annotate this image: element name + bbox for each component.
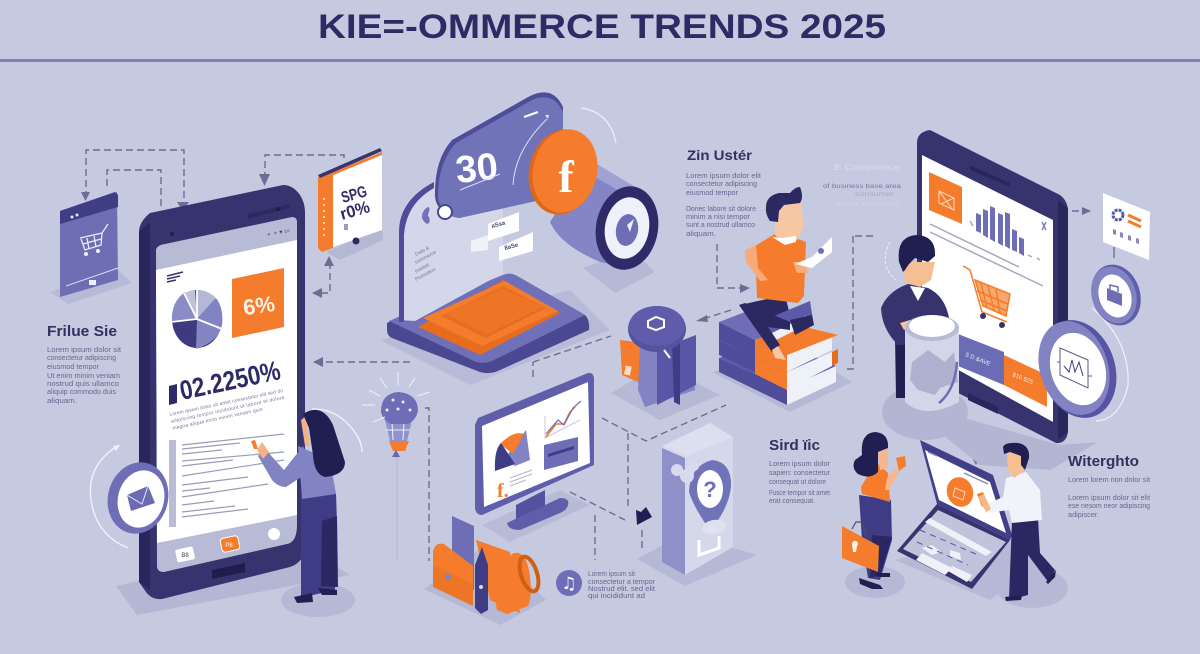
line chart on monitor [544,401,581,470]
orange stat card [232,268,284,338]
text block: Zin Ustér: aliquam. [686,229,716,238]
text block: Frilue Sie: consectetur adipiscing [47,353,116,362]
number bubble 30 [422,92,563,224]
text block: Zin Ustér: consectetur adipiscing [686,179,757,188]
skewed body text [169,388,287,432]
right phone screen: $16 $25 [1011,372,1034,386]
open laptop [895,440,1040,600]
text block: Sird iic [769,437,831,505]
central platform with orange tile: Data & [414,245,431,258]
mini cards on platform panel [471,212,533,261]
lock circle icon [1084,258,1148,332]
text block: Frilue Sie: aliquam. [47,396,77,405]
text block: Zin Ustér: minim a nisi tempor [686,212,750,221]
text block: Sird iic: consequat ut dolore [769,477,826,486]
central platform with orange tile: Promotion [414,267,437,283]
SPG card [318,148,383,260]
text block: Witerghto: ese nesom neor adipiscing [1068,501,1150,510]
text block: Frilue Sie: eiusmod tempor [47,362,99,371]
orange coin and dial cylinder [521,108,665,293]
text block: Sird iic: Sird ïic [769,437,820,454]
text block: Frilue Sie: aliquip commodo duis [47,387,116,396]
text block: E-Commerce: value retention [836,201,900,208]
text block: Frilue Sie: nostrud quis ullamco [47,379,119,388]
man with tablet sitting on books [712,187,852,412]
text block: Sird iic: Fusce tempor sit amet [769,488,831,497]
text block: Witerghto: Lorem ipsum dolor sit elit [1068,493,1151,502]
mini cards on platform panel: aSsa [491,220,507,230]
stack of books [712,312,852,412]
main smartphone [116,185,350,615]
title: KIE=-OMMERCE TRENDS 2025 [318,8,886,46]
bottom nav icons [175,528,280,563]
pie on monitor [495,430,530,471]
skewed body text: adipiscing tempor incididunt ut labore et dolore [170,395,285,425]
text block: E-Commerce: of business base area [823,183,901,190]
text block: Zin Ustér: Lorem ipsum dolor elit [686,171,762,180]
orange coin and dial cylinder: f [558,151,574,202]
flag marker [636,507,652,525]
text block: Witerghto: Witerghto [1068,453,1139,470]
orange bag and pencil group [424,516,546,625]
skewed body text: magna aliqua enim minim veniam quis [172,407,264,432]
bottom nav icons: B8 [181,553,189,559]
kiosk with lightbulb [637,423,757,586]
SPG card: r0% [338,197,372,224]
text block: Witerghto: adipiscer. [1068,510,1099,519]
mini cards on platform panel: 8aSe [504,242,520,252]
SPG card: SPG [339,183,369,207]
text block: Sird iic: Lorem ipsum dolor [769,459,830,468]
chart ring icon [1027,308,1129,428]
man in white shirt at laptop [978,443,1068,608]
text block: E-Commerce: E Commerce [834,163,901,172]
text block: E-Commerce [823,163,901,208]
kiosk with lightbulb: ? [703,477,717,502]
right phone screen [922,155,1053,422]
envelope circle icon [90,445,176,548]
music icon with text [556,569,656,600]
text block: Zin Ustér: sunt a nostrud ullamco [686,220,755,229]
left tablet with shopping cart [50,192,132,304]
box with lid icon [611,306,720,420]
phone screen: ⚬ ⚬ ▾ ▭ [266,228,291,239]
number bubble 30: 30 [454,146,500,192]
orange shopping cart [963,266,1010,322]
text block: Witerghto [1068,453,1151,519]
text block: Sird iic: sapien: consectetur [769,468,830,477]
music icon with text: ♫ [561,574,577,594]
music icon with text: Nostrud elit. sed elit [588,584,656,593]
music icon with text: consectetur a tempor [588,577,655,586]
central platform with orange tile [380,182,610,385]
text block: Zin Ustér: eiusmod tempor [686,188,738,197]
right phone screen: 5 D &AVE [964,352,991,368]
text block: Sird iic: erat consequat. [769,496,815,505]
bar chart [976,206,1024,256]
music icon with text: qui incididunt ad [588,591,645,600]
big percentage figure: 02.2250% [177,355,283,406]
text block: Frilue Sie: Ut enim minim veniam [47,371,120,380]
phone screen [156,217,297,572]
text block: Zin Ustér: Zin Ustér [687,147,753,163]
pie chart [171,289,222,349]
woman with shopping bag [842,432,906,598]
laptop keyboard [897,504,1010,589]
lightbulb balloon icon [312,372,430,457]
text block: Frilue Sie: Frilue Sie [47,323,117,340]
text block: Zin Ustér [686,147,762,238]
man with glass cylinder [881,235,968,440]
monitor with charts [475,373,594,542]
text block: E-Commerce: consumer [855,191,895,198]
orange stat card: 6% [241,291,276,320]
skewed body text: Lorem ipsum dolor sit amet consectetur elit sed do [169,388,284,418]
music icon with text: Lorem ipsum sit [588,569,636,578]
woman pointing at phone [251,410,355,617]
bottom nav icons: P8 [225,543,233,549]
monitor with charts: f. [497,480,509,502]
settings card [1103,193,1150,260]
dashed connector arrows [81,150,1114,561]
text block: Zin Ustér: Donec labore sit dolore [686,204,756,213]
text block: Witerghto: Lorem lorem non dolor sit [1068,475,1151,484]
text block: Frilue Sie [47,323,122,405]
central platform with orange tile: market [414,262,431,275]
text block: Frilue Sie: Lorem ipsum dolor sit [47,345,122,354]
central platform with orange tile: commerce [414,249,438,266]
large right smartphone [900,130,1098,470]
